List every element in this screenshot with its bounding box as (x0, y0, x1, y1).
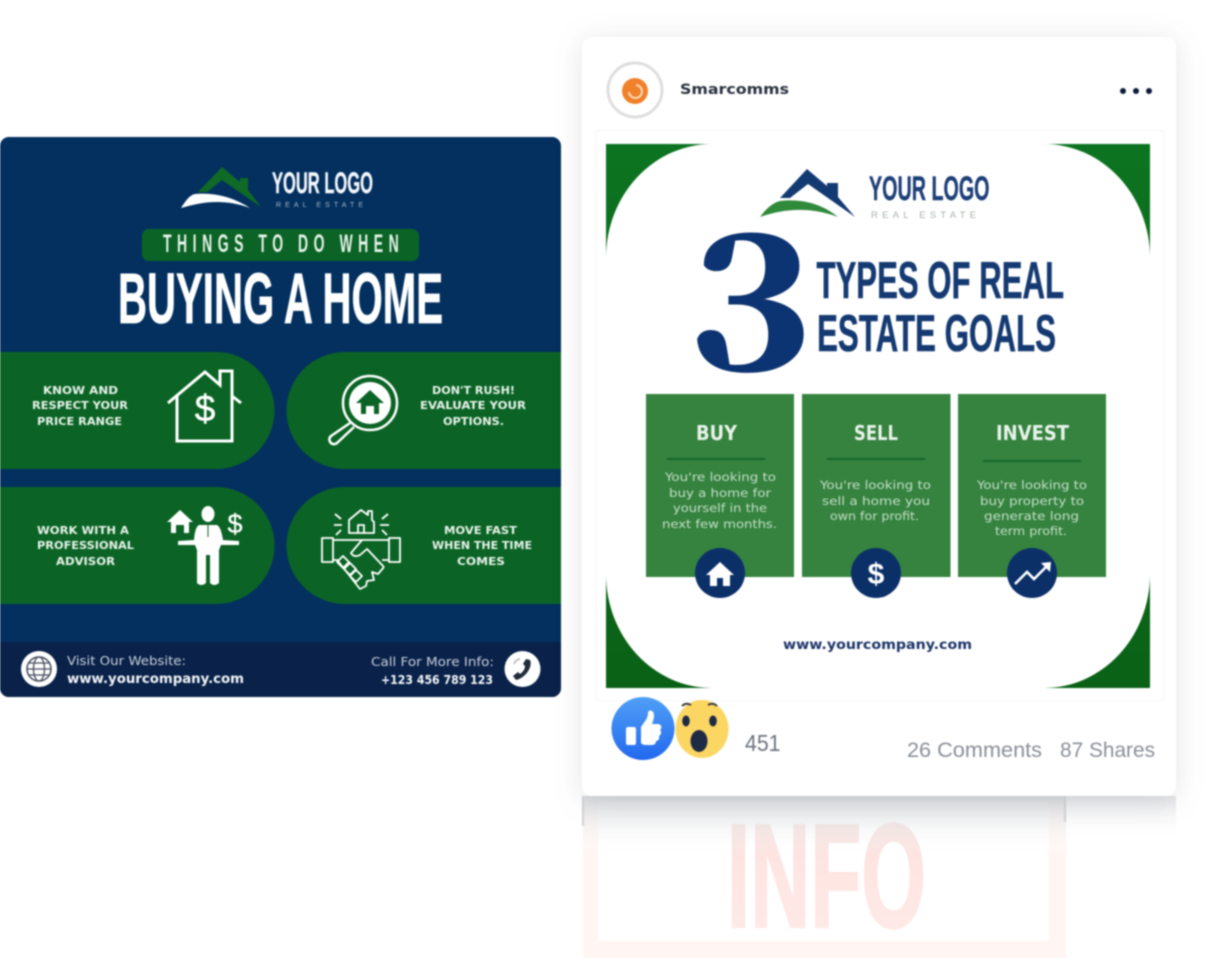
account name: Smarcomms (680, 82, 789, 98)
icon: home badge (695, 548, 745, 598)
avatar (608, 63, 662, 117)
text: move fast: WHEN THE TIME (432, 540, 532, 552)
icon: house with dollar (168, 371, 241, 441)
column: sell: SELL (854, 421, 898, 445)
panel: buying a home post (0, 137, 561, 698)
column: invest: You're looking to (976, 478, 1087, 492)
column: sell: You're looking to (819, 478, 931, 492)
heading: types of real estate goals (816, 252, 1064, 363)
post image frame (596, 130, 1164, 700)
heading: types of real estate goals: ESTATE GOALS (817, 305, 1056, 363)
icon: magnifying glass with house (329, 376, 397, 444)
footer: website (21, 651, 244, 687)
shares count: 87 Shares (1060, 739, 1155, 762)
footer: phone: Call For More Info: (371, 654, 494, 669)
text: work with a professional advisor: WORK WITH A (37, 525, 130, 537)
icon: phone (504, 651, 540, 687)
column: sell: own for profit. (830, 509, 919, 523)
column: sell (802, 394, 950, 598)
text: know and respect: PRICE RANGE (37, 416, 122, 428)
website url: www.yourcompany.com (783, 637, 972, 653)
icon: handshake with house (322, 510, 400, 589)
column: invest: term profit. (995, 524, 1067, 538)
text: move fast (432, 525, 532, 568)
heading: types of real estate goals: TYPES OF REAL (816, 252, 1064, 310)
reaction: like (612, 697, 674, 760)
icon: dollar badge (851, 548, 901, 598)
reaction count: 451 (745, 730, 780, 756)
text: work with a professional advisor: PROFESSIONAL (37, 540, 134, 552)
comments count: 26 Comments (907, 739, 1042, 762)
column: invest (958, 394, 1106, 598)
icon: advisor with house and dollar (167, 506, 243, 585)
footer: website: www.yourcompany.com (67, 672, 244, 687)
column: buy: next few months. (662, 517, 777, 531)
logo: white version (181, 167, 373, 209)
icon: house with dollar: $ (195, 388, 215, 429)
heading: buying a home: BUYING A HOME (118, 260, 443, 339)
logo: navy version: REAL ESTATE (871, 210, 976, 221)
footer band (0, 642, 561, 698)
big numeral 3: 3 (688, 156, 812, 422)
icon: globe (21, 651, 57, 687)
column: invest: generate long (984, 509, 1079, 523)
logo: white version: YOUR LOGO (272, 167, 373, 200)
pill: bottom right (286, 487, 561, 604)
text: know and respect: KNOW AND (43, 385, 118, 397)
text: work with a professional advisor (37, 525, 134, 568)
icon: growth arrow badge (1007, 548, 1057, 598)
pill: top left (0, 352, 274, 469)
menu dots (1120, 88, 1152, 94)
text: work with a professional advisor: ADVISOR (56, 556, 115, 568)
INFO watermark text: INFO (727, 794, 926, 959)
banner: things to do when: THINGS TO DO WHEN (163, 231, 399, 258)
column: buy: BUY (696, 421, 737, 445)
card drop shadow below the post (582, 796, 1176, 856)
icon: advisor with house and dollar: $ (227, 509, 243, 539)
text: do not rush: EVALUATE YOUR (420, 400, 526, 412)
logo: navy version (760, 169, 990, 221)
icon: dollar badge: $ (868, 558, 885, 591)
text: do not rush: DON'T RUSH! (432, 385, 515, 397)
column: invest: buy property to (980, 494, 1084, 508)
pill: bottom left (0, 487, 274, 604)
reaction: wow (676, 700, 728, 758)
text: know and respect (32, 385, 128, 428)
column: sell: sell a home you (822, 494, 930, 508)
footer: website: Visit Our Website: (67, 653, 186, 668)
footer: phone (371, 651, 540, 687)
column: invest: INVEST (996, 421, 1069, 445)
panel: social media post card (582, 37, 1176, 796)
column: buy (646, 394, 794, 598)
text: do not rush (420, 385, 526, 428)
column: buy: yourself in the (673, 501, 767, 515)
text: move fast: MOVE FAST (444, 525, 518, 537)
text: move fast: COMES (457, 556, 505, 568)
pill: top right (286, 352, 561, 469)
column: buy: You're looking to (664, 470, 776, 484)
logo: navy version: YOUR LOGO (869, 170, 990, 208)
green corners (606, 144, 1150, 688)
faded INFO poster behind the post card (583, 794, 1066, 959)
logo: white version: REAL ESTATE (276, 202, 363, 209)
footer: phone: +123 456 789 123 (381, 673, 493, 687)
text: do not rush: OPTIONS. (443, 416, 504, 428)
column: buy: buy a home for (669, 486, 771, 500)
text: know and respect: RESPECT YOUR (32, 400, 128, 412)
